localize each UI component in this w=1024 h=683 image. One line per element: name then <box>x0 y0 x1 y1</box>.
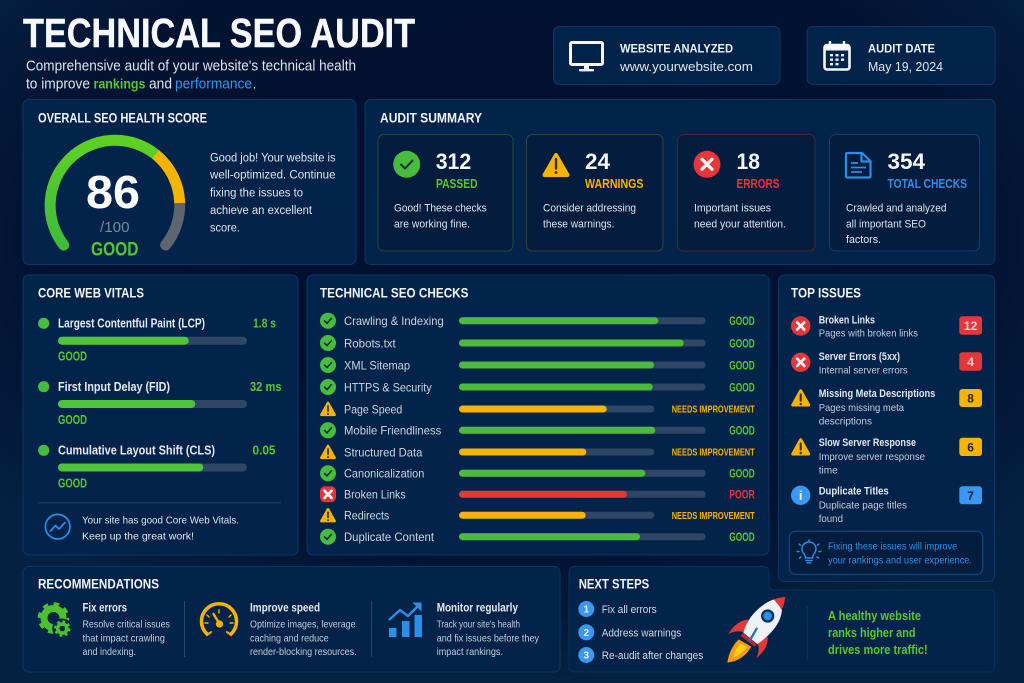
panel: top issues <box>778 275 994 582</box>
icon: rising bars <box>389 602 422 637</box>
warnings count: 24 <box>585 149 610 174</box>
check: broken links: POOR <box>729 490 755 502</box>
panel: core web vitals <box>23 275 298 555</box>
check: robots.txt: GOOD <box>729 338 755 350</box>
metric: LCP: GOOD <box>58 350 87 364</box>
panel: audit date <box>807 26 995 84</box>
step 2 <box>578 624 682 640</box>
issue: duplicate titles: 7 <box>967 489 974 503</box>
errors label: ERRORS <box>736 176 780 191</box>
check: crawling and indexing <box>320 313 755 329</box>
subtitle: rankings <box>94 76 146 92</box>
card: total checks <box>830 134 980 251</box>
recommendation: improve speed: render-blocking resources. <box>250 646 357 658</box>
check: mobile friendliness: GOOD <box>729 426 755 438</box>
closing message: ranks higher and <box>828 626 916 640</box>
check: crawling and indexing: GOOD <box>729 316 755 328</box>
icon: calendar <box>824 41 850 70</box>
check: duplicate content: GOOD <box>729 532 755 544</box>
step 3 <box>578 647 704 663</box>
date value: May 19, 2024 <box>868 59 943 74</box>
check: canonicalization: Canonicalization <box>344 467 424 481</box>
icon: gears <box>40 604 72 638</box>
check: HTTPS and security: HTTPS & Security <box>344 380 432 394</box>
passed label: PASSED <box>436 176 478 191</box>
recommendation: fix errors: that impact crawling <box>82 632 165 644</box>
icon: light bulb <box>797 540 821 563</box>
check: mobile friendliness <box>320 422 755 438</box>
closing message: A healthy website <box>828 609 921 623</box>
issue: duplicate titles <box>791 485 982 525</box>
check: canonicalization: GOOD <box>729 469 755 481</box>
check: crawling and indexing: Crawling & Indexing <box>344 314 444 328</box>
recommendation: monitor regularly: and fix issues before they <box>437 632 540 644</box>
vitals note: Keep up the great work! <box>82 530 194 542</box>
issue: slow server response <box>793 437 982 476</box>
step 3: Re-audit after changes <box>602 650 704 662</box>
vitals note <box>82 515 239 542</box>
label: website analyzed: WEBSITE ANALYZED <box>620 42 733 56</box>
issue: slow server response: 6 <box>967 440 974 454</box>
check: robots.txt <box>320 335 755 351</box>
recommendation: fix errors <box>40 603 170 658</box>
total description: all important SEO <box>846 218 926 230</box>
check: XML sitemap: XML Sitemap <box>344 358 410 372</box>
icon: error <box>694 151 720 178</box>
panel: website analyzed <box>554 26 780 84</box>
metric: CLS: Cumulative Layout Shift (CLS) <box>58 444 215 458</box>
score description: well-optimized. Continue <box>209 170 336 182</box>
subtitle: performance <box>175 76 252 92</box>
recommendation: fix errors: Resolve critical issues <box>82 619 170 631</box>
recommendation: improve speed: Improve speed <box>250 603 320 615</box>
check: XML sitemap <box>320 357 755 373</box>
errors description <box>694 203 786 230</box>
total description <box>846 203 946 246</box>
score description: score. <box>210 223 240 235</box>
recommendation: monitor regularly: impact rankings. <box>437 646 503 658</box>
passed description <box>394 203 487 230</box>
issue: broken links: Pages with broken links <box>819 328 918 340</box>
card: passed <box>378 134 513 251</box>
issue: slow server response: Slow Server Response <box>819 437 916 449</box>
check: page speed <box>321 402 755 416</box>
metric: CLS: 0.05 <box>252 444 276 458</box>
step 1 <box>578 601 657 617</box>
closing message: drives more traffic! <box>828 643 928 657</box>
issue: missing meta descriptions: Pages missing meta <box>819 402 904 414</box>
check: redirects <box>321 509 755 523</box>
heading: NEXT STEPS <box>579 576 649 591</box>
check: canonicalization <box>320 465 755 481</box>
check: duplicate content: Duplicate Content <box>344 530 435 544</box>
metric: CLS: GOOD <box>58 476 87 490</box>
step 2: 2 <box>584 628 590 639</box>
total description: Crawled and analyzed <box>846 203 946 215</box>
issue: duplicate titles: found <box>819 513 843 525</box>
website url: www.yourwebsite.com <box>619 59 753 74</box>
subtitle: and <box>149 76 172 92</box>
issue: missing meta descriptions <box>793 388 982 427</box>
check: duplicate content <box>320 529 755 545</box>
issue: duplicate titles: i <box>799 488 803 503</box>
step 2: Address warnings <box>602 628 682 640</box>
heading: RECOMMENDATIONS <box>38 576 159 591</box>
panel: audit summary <box>365 100 995 264</box>
check: page speed: NEEDS IMPROVEMENT <box>672 405 755 416</box>
icon: trend circle <box>45 514 70 539</box>
passed description: Good! These checks <box>394 203 487 215</box>
metric: CLS <box>38 444 276 490</box>
heading: TOP ISSUES <box>791 285 861 300</box>
metric: FID: First Input Delay (FID) <box>58 380 170 394</box>
label: audit date: AUDIT DATE <box>868 42 935 56</box>
panel: technical SEO checks <box>307 275 769 555</box>
card: warnings <box>526 134 663 251</box>
callout text: your rankings and user experience. <box>828 555 972 566</box>
metric: LCP: Largest Contentful Paint (LCP) <box>58 316 205 330</box>
card: errors <box>678 134 815 251</box>
recommendation: monitor regularly <box>389 602 540 658</box>
panel: next steps <box>569 566 994 672</box>
issue: missing meta descriptions: Missing Meta Descriptions <box>819 388 935 400</box>
metric: LCP: 1.8 s <box>253 316 276 330</box>
icon: rocket <box>727 597 785 663</box>
subtitle: . <box>252 76 257 92</box>
callout text <box>828 541 972 566</box>
score rating: GOOD <box>91 240 138 260</box>
issue: slow server response: time <box>819 464 838 476</box>
total count: 354 <box>888 149 925 174</box>
metric: FID: 32 ms <box>250 380 282 394</box>
warnings description: these warnings. <box>543 218 614 230</box>
recommendation: fix errors: and indexing. <box>82 646 136 658</box>
step 3: 3 <box>584 651 590 662</box>
issue: server errors: Server Errors (5xx) <box>819 351 900 363</box>
check: structured data: NEEDS IMPROVEMENT <box>672 448 755 459</box>
subtitle: to improve <box>26 76 90 92</box>
warnings description <box>543 203 636 230</box>
check: broken links: Broken Links <box>344 488 406 502</box>
warnings label: WARNINGS <box>585 176 644 191</box>
check: HTTPS and security: GOOD <box>729 382 755 394</box>
issue: broken links <box>791 314 982 340</box>
issue: broken links: 12 <box>964 319 978 333</box>
gauge <box>50 140 180 245</box>
heading: OVERALL SEO HEALTH SCORE <box>38 111 207 126</box>
check: structured data <box>321 445 755 459</box>
heading: AUDIT SUMMARY <box>380 111 482 126</box>
recommendation: monitor regularly: Monitor regularly <box>437 603 519 615</box>
issue: missing meta descriptions: 8 <box>967 392 974 406</box>
total label: TOTAL CHECKS <box>888 176 967 191</box>
subtitle: Comprehensive audit of your website's technical health <box>26 58 356 74</box>
check: redirects: NEEDS IMPROVEMENT <box>672 511 755 522</box>
metric: LCP <box>38 316 276 364</box>
check: mobile friendliness: Mobile Friendliness <box>344 424 441 438</box>
score description: achieve an excellent <box>210 205 313 217</box>
check: page speed: Page Speed <box>344 402 402 416</box>
check: structured data: Structured Data <box>344 445 423 459</box>
issue: broken links: Broken Links <box>819 314 875 326</box>
errors description: need your attention. <box>694 218 786 230</box>
score description <box>209 152 336 235</box>
heading: CORE WEB VITALS <box>38 285 144 300</box>
issue: duplicate titles: Duplicate Titles <box>819 485 889 497</box>
icon: warning <box>544 155 568 175</box>
recommendation: improve speed <box>202 603 357 658</box>
score description: fixing the issues to <box>210 188 303 200</box>
callout: fixing issues <box>789 531 983 574</box>
check: redirects: Redirects <box>344 509 389 523</box>
recommendation: improve speed: Optimize images, leverage <box>250 619 356 631</box>
panel: recommendations <box>23 566 560 672</box>
issue: server errors: 4 <box>967 355 974 369</box>
subtitle <box>26 58 356 92</box>
metric: FID: GOOD <box>58 413 87 427</box>
check: robots.txt: Robots.txt <box>344 336 396 350</box>
closing message <box>828 609 928 657</box>
check: HTTPS and security <box>320 379 755 395</box>
callout text: Fixing these issues will improve <box>828 541 958 552</box>
check: XML sitemap: GOOD <box>729 360 755 372</box>
icon: check <box>393 151 420 178</box>
issue: server errors: Internal server errors <box>819 364 908 376</box>
score description: Good job! Your website is <box>210 152 336 164</box>
score maximum: /100 <box>100 219 130 236</box>
step 1: Fix all errors <box>602 604 657 616</box>
step 1: 1 <box>584 605 590 616</box>
passed count: 312 <box>436 149 471 174</box>
icon: monitor <box>570 42 602 71</box>
metric: FID <box>38 380 282 427</box>
errors count: 18 <box>736 149 760 174</box>
recommendation: improve speed: caching and reduce <box>250 632 329 644</box>
passed description: are working fine. <box>394 218 470 230</box>
issue: missing meta descriptions: descriptions <box>819 415 872 427</box>
score: 86 <box>86 166 140 218</box>
panel: overall SEO health score <box>23 100 356 264</box>
check: broken links <box>320 486 755 502</box>
heading: TECHNICAL SEO CHECKS <box>320 285 468 300</box>
issue: duplicate titles: Duplicate page titles <box>819 499 907 511</box>
issue: slow server response: Improve server response <box>819 451 925 463</box>
recommendation: monitor regularly: Track your site's health <box>437 619 520 631</box>
errors description: Important issues <box>694 203 771 215</box>
icon: speedometer <box>202 604 236 635</box>
recommendation: fix errors: Fix errors <box>82 603 127 615</box>
title: TECHNICAL SEO AUDIT <box>23 10 415 56</box>
issue: server errors <box>791 351 982 376</box>
icon: document <box>846 153 870 178</box>
warnings description: Consider addressing <box>543 203 636 215</box>
vitals note: Your site has good Core Web Vitals. <box>82 515 239 527</box>
total description: factors. <box>846 234 881 246</box>
